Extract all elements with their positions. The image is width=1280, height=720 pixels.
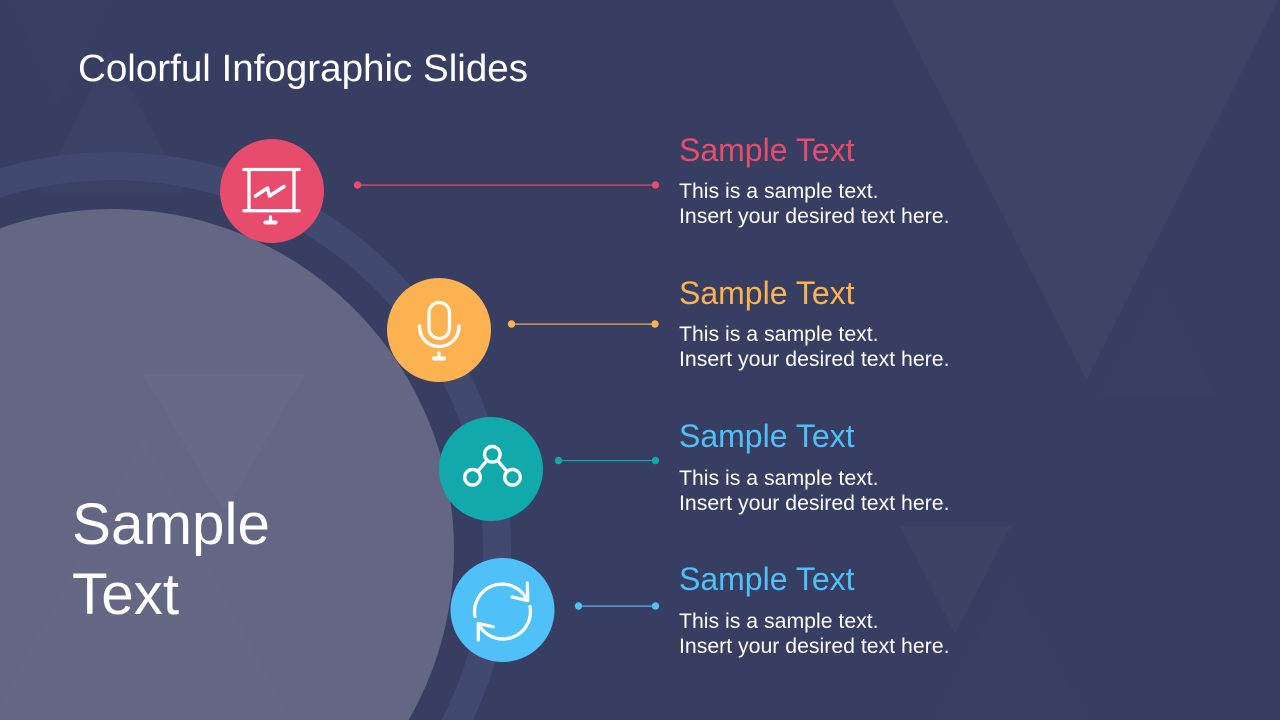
item 4: refresh [450,558,949,662]
description 1: Insert your desired text here. [679,204,949,228]
central label: Text [72,562,179,627]
central label [72,492,270,627]
icon: presentation board [220,139,324,243]
description 2 [679,322,949,371]
description 3: Insert your desired text here. [679,491,949,515]
connector line 4 [575,602,659,610]
description 4 [679,609,949,658]
icon: refresh arrows [450,558,554,662]
description 2: This is a sample text. [679,322,879,346]
heading 1: Sample Text [679,132,855,168]
description 3: This is a sample text. [679,466,879,490]
connector line 1 [354,181,659,189]
description 1 [679,179,949,228]
connector line 2 [508,320,659,328]
icon: microphone [387,278,491,382]
heading 2: Sample Text [679,275,855,311]
description 4: Insert your desired text here. [679,634,949,658]
description 3 [679,466,949,515]
title: Colorful Infographic Slides [78,48,528,90]
item 2: microphone [387,275,949,382]
description 1: This is a sample text. [679,179,879,203]
item 3: network [439,417,949,521]
outer ring [0,152,511,720]
icon: network nodes [439,417,543,521]
connector line 3 [555,457,659,464]
heading 3: Sample Text [679,418,855,454]
heading 4: Sample Text [679,561,855,597]
description 4: This is a sample text. [679,609,879,633]
central label: Sample [72,492,270,557]
description 2: Insert your desired text here. [679,347,949,371]
large central circle [0,209,454,720]
item 1: presentation [220,132,949,243]
